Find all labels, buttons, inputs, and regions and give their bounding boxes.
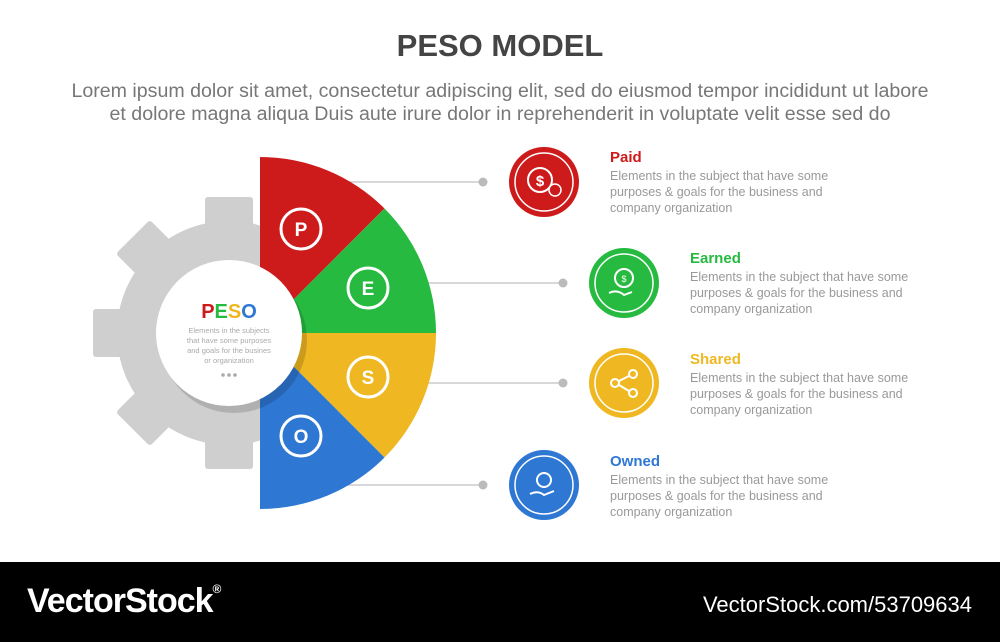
- text: Owned: Elements in the subject that have some purposes & goals for the business and company organization: [610, 473, 828, 519]
- text: Earned: Earned: [690, 250, 741, 267]
- diagram: P: [295, 220, 308, 241]
- center circle: or organization: [204, 356, 254, 365]
- center circle: PESO: [201, 301, 257, 323]
- text: Earned: [690, 250, 908, 316]
- connector lines: [340, 178, 568, 490]
- diagram: E: [362, 279, 374, 300]
- footer: VectorStock®: [27, 582, 220, 620]
- center circle: Elements in the subjects: [188, 326, 270, 335]
- text: Paid: Paid: [610, 149, 642, 166]
- icon circles: $: [621, 274, 627, 284]
- text: Shared: Elements in the subject that have some purposes & goals for the business and company organization: [690, 371, 908, 417]
- text: Owned: Owned: [610, 453, 660, 470]
- subtitle: Lorem ipsum dolor sit amet, consectetur adipiscing elit, sed do eiusmod tempor incididunt ut labore: [71, 80, 929, 102]
- diagram: S: [362, 368, 374, 389]
- text: Paid: Elements in the subject that have some purposes & goals for the business and company organization: [610, 169, 828, 215]
- footer: [0, 562, 1000, 642]
- text: Earned: Elements in the subject that have some purposes & goals for the business and company organization: [690, 270, 908, 316]
- segments: [260, 157, 436, 509]
- gear: [93, 197, 365, 469]
- icon circles: $: [536, 173, 545, 190]
- footer: VectorStock.com/53709634: [703, 592, 972, 617]
- text: Shared: Shared: [690, 351, 741, 368]
- text: Paid: [610, 149, 828, 215]
- diagram: O: [294, 427, 308, 448]
- subtitle: et dolore magna aliqua Duis aute irure dolor in reprehenderit in voluptate velit esse sed do: [110, 103, 890, 125]
- text: Owned: [610, 453, 828, 519]
- text: Shared: [690, 351, 908, 417]
- subtitle: [71, 80, 929, 125]
- letter badges: [281, 209, 388, 456]
- center circle: and goals for the busines: [187, 346, 271, 355]
- center circle: [156, 260, 307, 413]
- center circle: that have some purposes: [187, 336, 271, 345]
- icon circles: [509, 147, 659, 520]
- title: PESO MODEL: [397, 28, 603, 63]
